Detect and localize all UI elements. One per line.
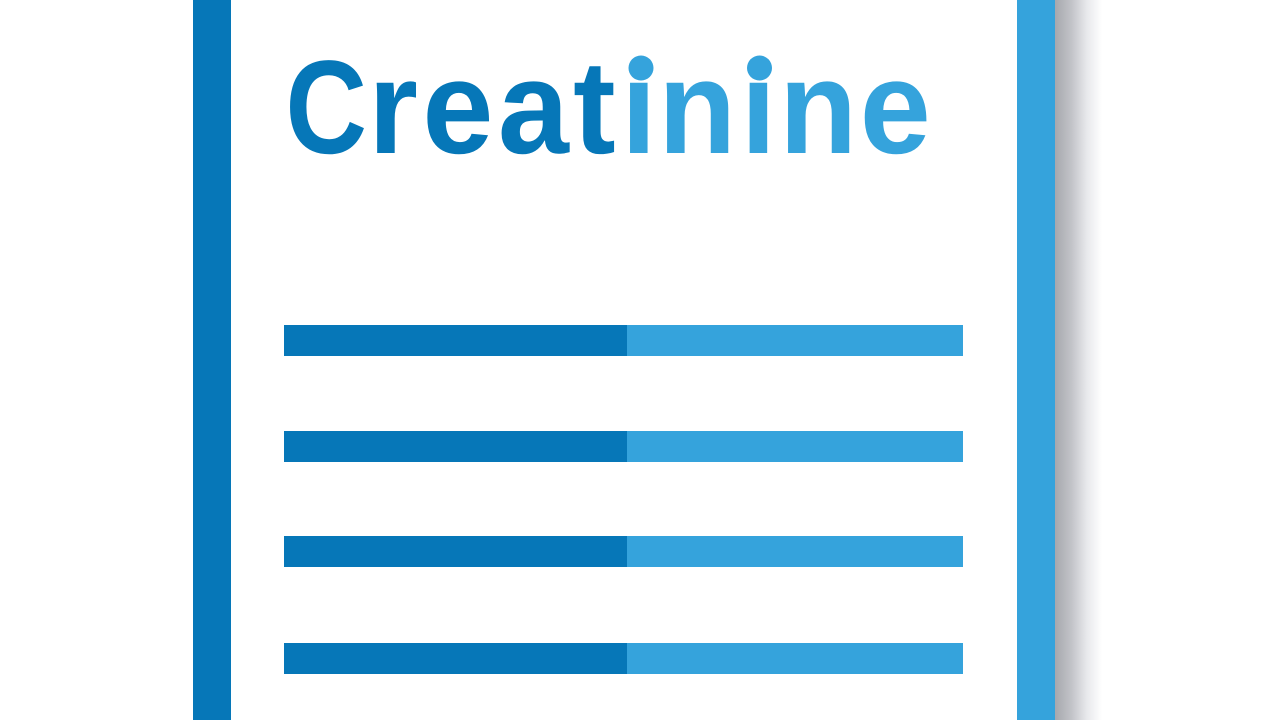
- text line 3: [284, 536, 963, 567]
- title: C: [285, 33, 367, 182]
- title: inine: [621, 33, 931, 182]
- text line 4: [284, 643, 963, 674]
- right page border: [1017, 0, 1055, 720]
- text line 1: [284, 325, 963, 356]
- title: reat: [368, 33, 616, 182]
- title: [285, 33, 931, 182]
- page shadow: [1055, 0, 1102, 720]
- left page border: [193, 0, 231, 720]
- text line 2: [284, 431, 963, 462]
